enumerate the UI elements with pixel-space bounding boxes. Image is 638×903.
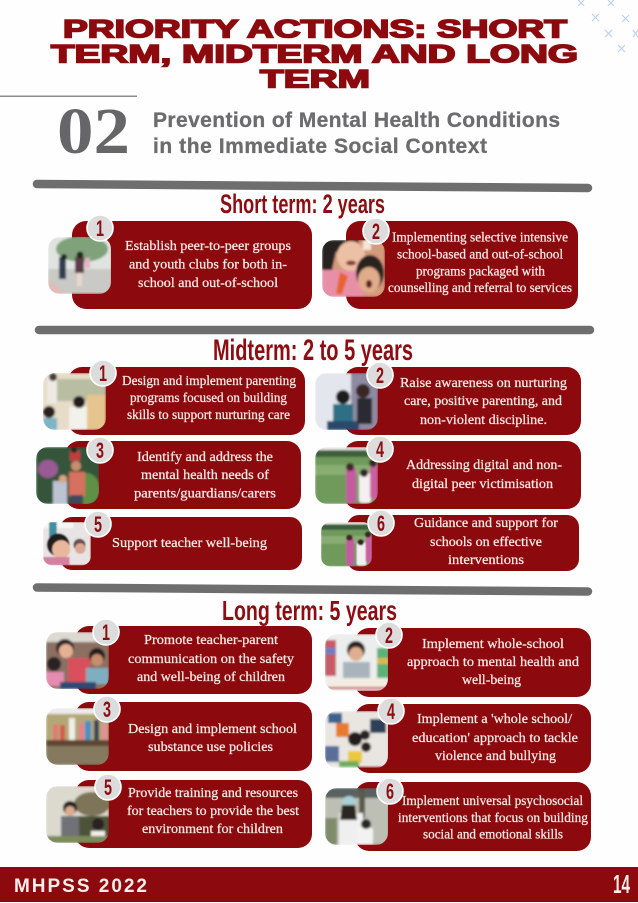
card text: Support teacher well-being [112,535,267,550]
title: TERM, MIDTERM AND LONG [51,40,578,68]
divider bar [39,326,590,334]
number badge: 4 [376,437,384,462]
photo: girls in a field [315,447,378,504]
number badge [85,511,111,537]
card text: interventions [448,552,524,567]
number badge [95,774,121,800]
card text: parents/guardians/carers [134,486,276,500]
card text: Implement a 'whole school/ [417,711,572,726]
card text [398,793,588,842]
number badge [93,619,119,645]
card text: well-being [462,672,521,687]
number badge [368,510,394,536]
number badge [87,215,113,241]
panel: short term [48,189,578,309]
photo: laughing children [322,240,385,297]
number badge [377,778,403,804]
photo: mother reading with child [315,373,378,430]
card: long 4 [325,698,591,773]
title: TERM [260,66,370,94]
card text [127,785,299,836]
card: long 6 [325,778,591,851]
number badge: 6 [386,779,394,804]
number badge [367,436,393,462]
card text: Identify and address the [137,449,273,464]
card: mid 5 [43,511,302,570]
card: long 5 [46,774,312,848]
photo: students walking [48,236,112,294]
card: mid 4 [315,436,581,509]
card text [406,457,563,491]
photo: boy with books [325,634,389,691]
number badge [376,622,402,648]
number badge [367,362,393,388]
card text [400,375,567,427]
title: PRIORITY ACTIONS: SHORT [63,16,567,44]
card text: interventions that focus on building [398,810,588,825]
card text: counselling and referral to services [388,280,572,295]
card text: Guidance and support for [414,515,559,530]
photo: smiling children [43,522,91,565]
footer [0,867,638,902]
card text: education' approach to tackle [412,730,578,745]
card text: Establish peer-to-peer groups [125,238,291,253]
heading: long term: Long term: 5 years [222,595,397,626]
number badge: 6 [377,511,385,536]
photo: mother and child walking [325,788,389,845]
photo: girls in a field [321,522,372,566]
card text: mental health needs of [141,467,270,482]
card: long 1 [46,619,312,694]
number badge: 2 [376,363,384,388]
card: long 2 [325,622,591,697]
card text: Addressing digital and non- [406,457,563,472]
title [51,16,578,94]
number badge [87,437,113,463]
number badge: 3 [103,697,111,722]
number badge: 1 [99,361,107,386]
heading: short term: Short term: 2 years [220,189,385,219]
card text: non-violent discipline. [420,412,547,427]
card text: Provide training and resources [128,785,298,800]
card text: Implementing selective intensive [392,230,568,244]
footer label: MHPSS 2022 [14,876,147,897]
number badge [90,360,116,386]
card text: and well-being of children [137,669,285,684]
card text: Promote teacher-parent [144,632,278,647]
card: short 1 [48,215,312,309]
card: mid 3 [36,437,301,509]
card text [412,711,578,763]
card text: Implement whole-school [422,636,564,651]
card text: approach to mental health and [407,654,579,669]
number badge [378,698,404,724]
card text [134,449,276,500]
card text: school-based and out-of-school [397,246,563,262]
card text: communication on the safety [128,651,294,666]
card text: substance use policies [148,739,273,754]
section heading: in the Immediate Social Context [153,135,487,158]
heading: midterm: Midterm: 2 to 5 years [213,334,413,367]
number badge: 5 [94,512,102,537]
card text: and youth clubs for both in- [129,256,288,272]
card text: violence and bullying [435,748,556,763]
number badge [363,218,389,244]
divider bar [37,588,588,592]
card text: Raise awareness on nurturing [400,375,567,390]
photo: children on a bridge [46,708,109,765]
card text: Design and implement parenting [122,373,296,388]
card text: digital peer victimisation [412,476,553,491]
card: mid 6 [321,510,579,571]
section number: 02 [57,95,130,168]
card text [128,721,297,754]
card text: Design and implement school [128,721,297,736]
card text [407,636,579,687]
card text: care, positive parenting, and [404,393,562,408]
card text: school and out-of-school [138,275,278,290]
section heading: Prevention of Mental Health Conditions [153,109,560,132]
panel: midterm [36,334,581,571]
card: short 2 [322,218,578,309]
photo: three children on a sofa [46,632,109,689]
number badge: 5 [104,775,112,800]
card text [414,515,559,567]
card text: programs packaged with [416,264,545,278]
card text: environment for children [142,821,283,836]
number badge: 2 [372,219,380,244]
card text: schools on effective [430,534,542,549]
card text: social and emotional skills [423,826,563,842]
number badge: 1 [102,620,110,645]
panel: long term [46,595,591,851]
number badge: 3 [96,438,104,463]
photo: teacher and child outdoors [46,786,110,843]
divider bar [37,184,588,188]
card: mid 2 [315,362,581,435]
header rule [0,96,137,97]
card text [125,238,291,290]
photo: children lying in a circle [325,711,389,767]
card text: for teachers to provide the best [127,803,299,818]
card text [388,230,572,295]
section heading [153,109,560,158]
card: long 3 [46,696,312,771]
photo: family at home [43,373,106,430]
card text: skills to support nurturing care [127,407,290,422]
card text: programs focused on building [130,390,287,405]
number badge: 1 [96,216,104,241]
card text: Implement universal psychosocial [402,793,583,808]
photo: family outdoors [36,447,100,505]
number badge [94,696,120,722]
number badge: 2 [385,623,393,648]
card: mid 1 [43,360,305,435]
decorative cross pattern [578,0,638,52]
card text [122,373,296,422]
card text [128,632,294,684]
number badge: 4 [387,699,395,724]
